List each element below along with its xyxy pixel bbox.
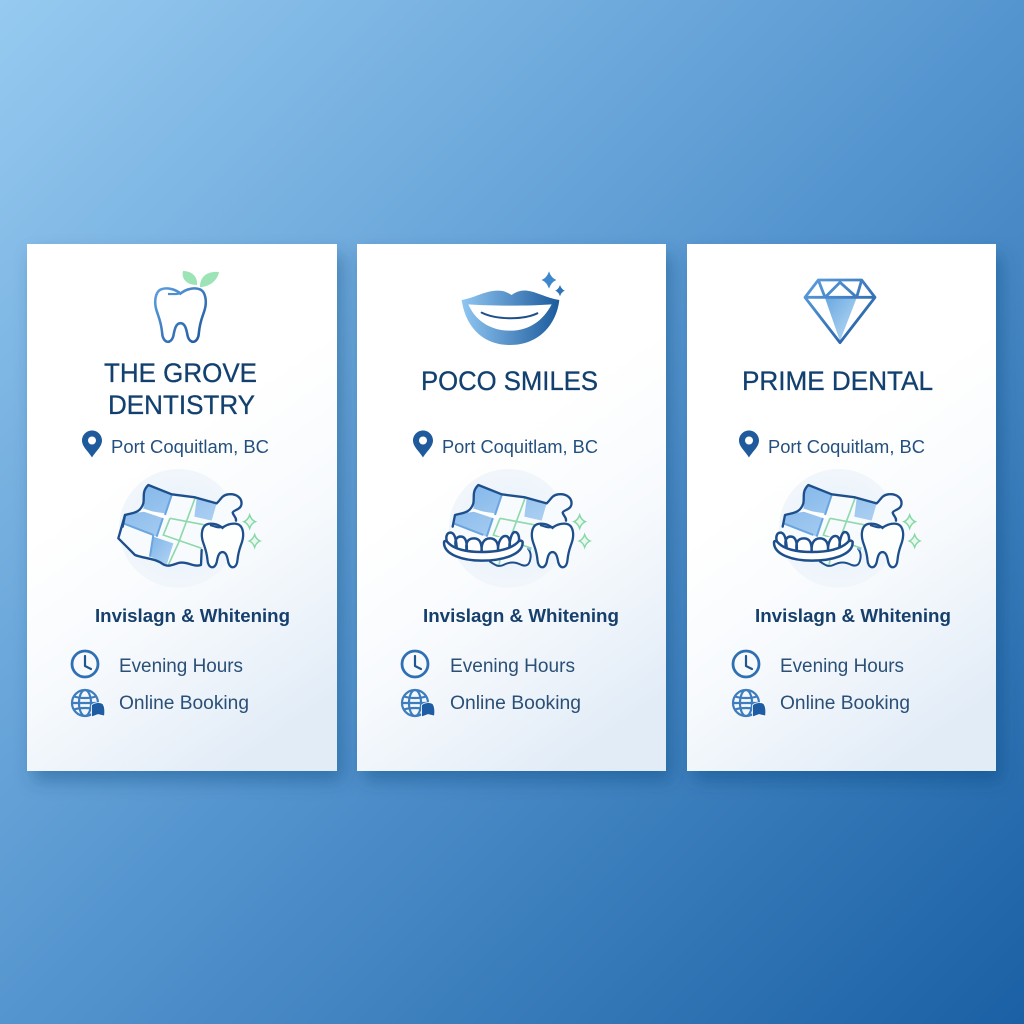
panel: Prime Dental: [687, 244, 996, 771]
title: THE GROVE: [104, 358, 257, 388]
icon: globe booking: [733, 690, 766, 717]
icon: location pin: [739, 430, 759, 458]
icon: tooth with leaves: [155, 271, 219, 342]
panel: The Grove Dentistry: [27, 244, 337, 771]
services text: Invislagn & Whitening: [755, 605, 951, 626]
services text: Invislagn & Whitening: [423, 605, 619, 626]
evening hours text: Evening Hours: [450, 656, 575, 677]
title: POCO SMILES: [421, 366, 598, 396]
icon: globe booking: [72, 690, 105, 717]
icon: globe booking: [402, 690, 435, 717]
icon: clock: [72, 651, 98, 677]
evening hours text: Evening Hours: [119, 656, 243, 677]
location text: Port Coquitlam, BC: [442, 437, 598, 457]
illustration: map, aligners and tooth: [774, 469, 920, 588]
card background: The Grove: [27, 244, 337, 771]
card background: Poco Smiles: [357, 244, 666, 771]
title: [104, 358, 257, 420]
icon: clock: [733, 651, 759, 677]
location text: Port Coquitlam, BC: [111, 437, 269, 457]
title: PRIME DENTAL: [742, 366, 933, 396]
panel: Poco Smiles: [357, 244, 666, 771]
online booking text: Online Booking: [119, 693, 249, 714]
location text: Port Coquitlam, BC: [768, 437, 925, 457]
icon: location pin: [82, 430, 102, 458]
illustration: map, aligners and tooth: [444, 469, 590, 588]
services text: Invislagn & Whitening: [95, 605, 290, 626]
icon: diamond: [805, 280, 875, 343]
card background: Prime Dental: [687, 244, 996, 771]
icon: clock: [402, 651, 428, 677]
icon: location pin: [413, 430, 433, 458]
online booking text: Online Booking: [780, 693, 910, 714]
evening hours text: Evening Hours: [780, 656, 904, 677]
online booking text: Online Booking: [450, 693, 581, 714]
illustration: map with tooth: [118, 469, 260, 588]
title: DENTISTRY: [108, 390, 255, 420]
icon: smile with sparkles: [462, 271, 565, 345]
